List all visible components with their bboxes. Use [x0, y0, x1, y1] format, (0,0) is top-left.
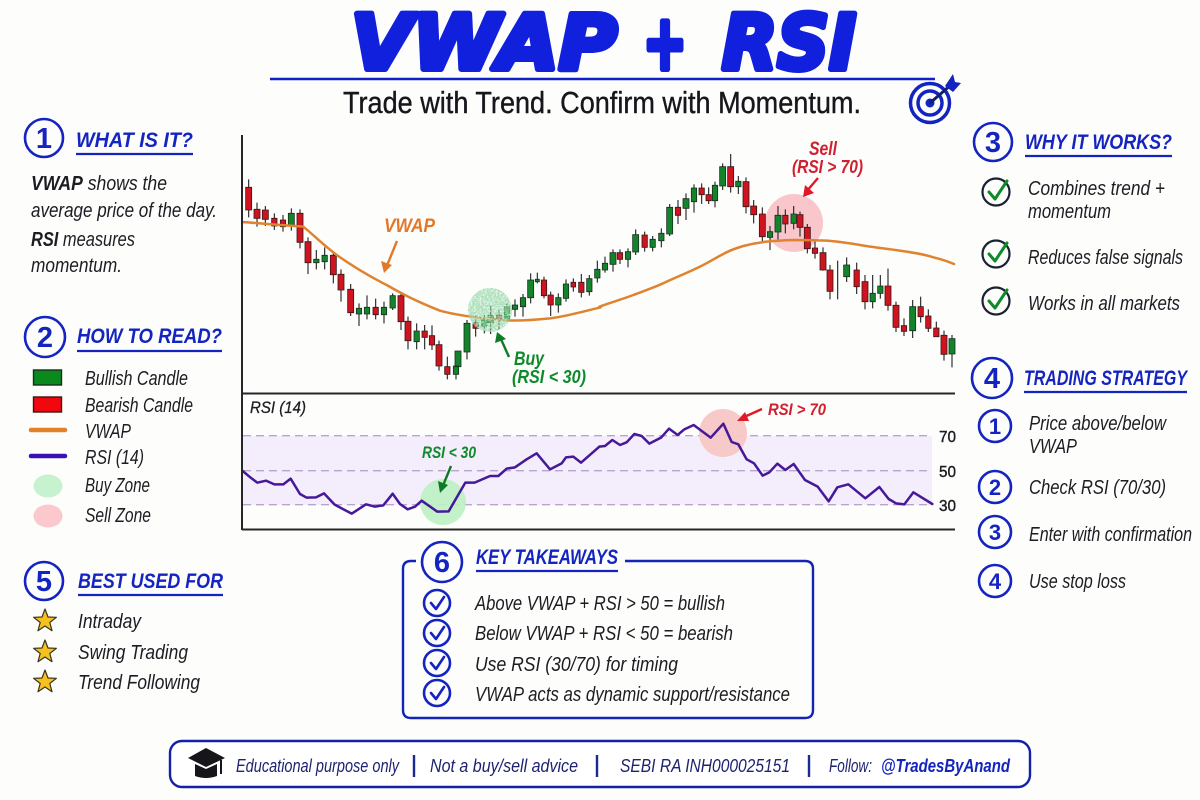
text block: definition of VWAP and RSI [31, 173, 217, 277]
text block: definition of VWAP and RSI: VWAP shows the [31, 173, 167, 195]
heading: why it works: WHY IT WORKS? [1025, 131, 1172, 154]
panel: how to read [25, 317, 222, 528]
legend: VWAP line [31, 421, 132, 443]
item: trend following: Trend Following [78, 672, 200, 694]
RSI axis labels: 30 [939, 498, 956, 515]
panel border [403, 561, 813, 718]
legend: bearish candle [34, 395, 193, 417]
footer text: educational purpose: Educational purpose only [236, 756, 400, 776]
step 1: 1 [989, 414, 1001, 439]
label: sell signal with arrow: Sell [809, 139, 838, 160]
panel: best used for [25, 562, 224, 694]
takeaway 4: VWAP acts as dynamic support/resistance [475, 684, 790, 706]
RSI sell zone circle [699, 409, 747, 457]
item: intraday [34, 609, 142, 633]
badge 5 [25, 562, 63, 600]
item: swing trading: Swing Trading [78, 642, 188, 664]
legend: bearish candle: Bearish Candle [85, 395, 193, 417]
RSI buy zone circle [420, 479, 466, 525]
panel: price chart [243, 139, 955, 387]
panel: RSI chart [243, 398, 956, 525]
legend: bullish candle: Bullish Candle [85, 368, 188, 390]
step 2: Check RSI (70/30) [1029, 477, 1166, 499]
label: buy signal with arrow [495, 332, 586, 387]
legend: RSI line [31, 447, 144, 469]
takeaway 4 [424, 680, 790, 706]
legend: buy zone: Buy Zone [85, 475, 150, 497]
badge 5: 5 [36, 566, 52, 598]
step 1: VWAP [1029, 436, 1078, 458]
item: combines trend and momentum [982, 178, 1165, 223]
step 1 [979, 410, 1167, 458]
legend: sell zone [34, 504, 151, 528]
icon: target with arrow [910, 74, 961, 122]
item: swing trading [34, 640, 188, 664]
label: buy signal with arrow: (RSI < 30) [512, 367, 586, 387]
takeaway 1: Above VWAP + RSI > 50 = bullish [474, 593, 725, 615]
RSI heading: RSI (14) [250, 398, 306, 417]
takeaway 3: Use RSI (30/70) for timing [475, 654, 678, 676]
label: RSI below 30 with arrow [422, 443, 476, 493]
step 4: 4 [989, 569, 1002, 594]
item: intraday: Intraday [78, 611, 142, 633]
legend: RSI line: RSI (14) [85, 447, 144, 469]
subtitle: Trade with Trend. Confirm with Momentum. [343, 85, 861, 120]
step 4: Use stop loss [1029, 571, 1126, 593]
footer text: not advice: Not a buy/sell advice [430, 756, 578, 776]
badge 6 [422, 542, 462, 582]
takeaway 2 [424, 620, 733, 646]
legend: buy zone [34, 474, 150, 498]
heading: best used for: BEST USED FOR [78, 570, 224, 593]
RSI reference lines [243, 436, 932, 505]
text block: definition of VWAP and RSI: momentum. [31, 255, 122, 277]
footer text: follow handle: @TradesByAnand [881, 756, 1011, 776]
label: sell signal with arrow: (RSI > 70) [792, 157, 863, 177]
legend: bullish candle [34, 368, 188, 390]
text block: definition of VWAP and RSI: average price of the day. [31, 200, 217, 222]
overbought/oversold band [243, 436, 932, 505]
panel: key takeaways [403, 542, 813, 718]
badge 6: 6 [434, 547, 450, 579]
footer text: follow handle: Follow: [829, 756, 872, 776]
step 3 [979, 516, 1192, 548]
RSI line [243, 424, 932, 514]
badge 1: 1 [36, 123, 52, 155]
item: reduces false signals [982, 240, 1183, 269]
item: combines trend and momentum: momentum [1028, 201, 1111, 223]
badge 4 [972, 358, 1012, 398]
RSI axis labels [939, 429, 956, 515]
badge 3 [974, 123, 1012, 161]
label: sell signal with arrow [792, 139, 863, 197]
footer text: SEBI registration: SEBI RA INH000025151 [620, 756, 790, 776]
label: RSI below 30 with arrow: RSI < 30 [422, 443, 476, 462]
chart axes [242, 135, 955, 530]
badge 3: 3 [985, 127, 1001, 159]
takeaway 3 [424, 650, 678, 676]
label: RSI above 70 with arrow: RSI > 70 [768, 400, 826, 419]
text block: definition of VWAP and RSI: RSI measures [31, 229, 135, 251]
icon: graduation cap [188, 748, 225, 778]
title: + [643, 0, 687, 87]
badge 1 [25, 119, 63, 157]
takeaway 1 [424, 590, 725, 616]
item: trend following [34, 670, 200, 694]
footer border [170, 741, 1030, 787]
badge 2 [25, 317, 65, 357]
heading: key takeaways: KEY TAKEAWAYS [476, 546, 618, 569]
heading: what is it: WHAT IS IT? [76, 129, 193, 152]
label: VWAP with arrow [381, 216, 435, 273]
candlesticks [246, 154, 955, 379]
title [351, 0, 856, 87]
title: VWAP [351, 0, 617, 87]
label: RSI above 70 with arrow [737, 400, 826, 421]
step 4 [979, 565, 1126, 597]
step 1: Price above/below [1029, 413, 1167, 435]
sell zone circle [765, 194, 823, 252]
badge 4: 4 [984, 363, 1000, 395]
footer disclaimer bar [170, 741, 1030, 787]
legend: sell zone: Sell Zone [85, 505, 151, 527]
RSI axis labels: 50 [939, 464, 956, 481]
VWAP line [243, 222, 954, 320]
title: RSI [722, 0, 856, 87]
panel: why it works [974, 123, 1183, 315]
takeaway 2: Below VWAP + RSI < 50 = bearish [475, 623, 733, 645]
RSI axis labels: 70 [939, 429, 956, 446]
panel: what is it [25, 119, 217, 277]
heading: how to read: HOW TO READ? [77, 325, 222, 348]
legend: VWAP line: VWAP [85, 421, 132, 443]
panel: trading strategy [972, 358, 1192, 597]
buy zone circle [468, 288, 512, 332]
item: combines trend and momentum: Combines trend + [1028, 178, 1165, 200]
step 3: 3 [989, 520, 1001, 545]
title rule [270, 78, 935, 80]
item: works in all markets [982, 288, 1180, 315]
step 2: 2 [989, 475, 1001, 500]
badge 2: 2 [37, 322, 53, 354]
label: VWAP with arrow: VWAP [384, 216, 435, 237]
label: buy signal with arrow: Buy [514, 349, 545, 370]
footer text: follow handle [829, 756, 1011, 776]
step 2 [979, 471, 1166, 503]
